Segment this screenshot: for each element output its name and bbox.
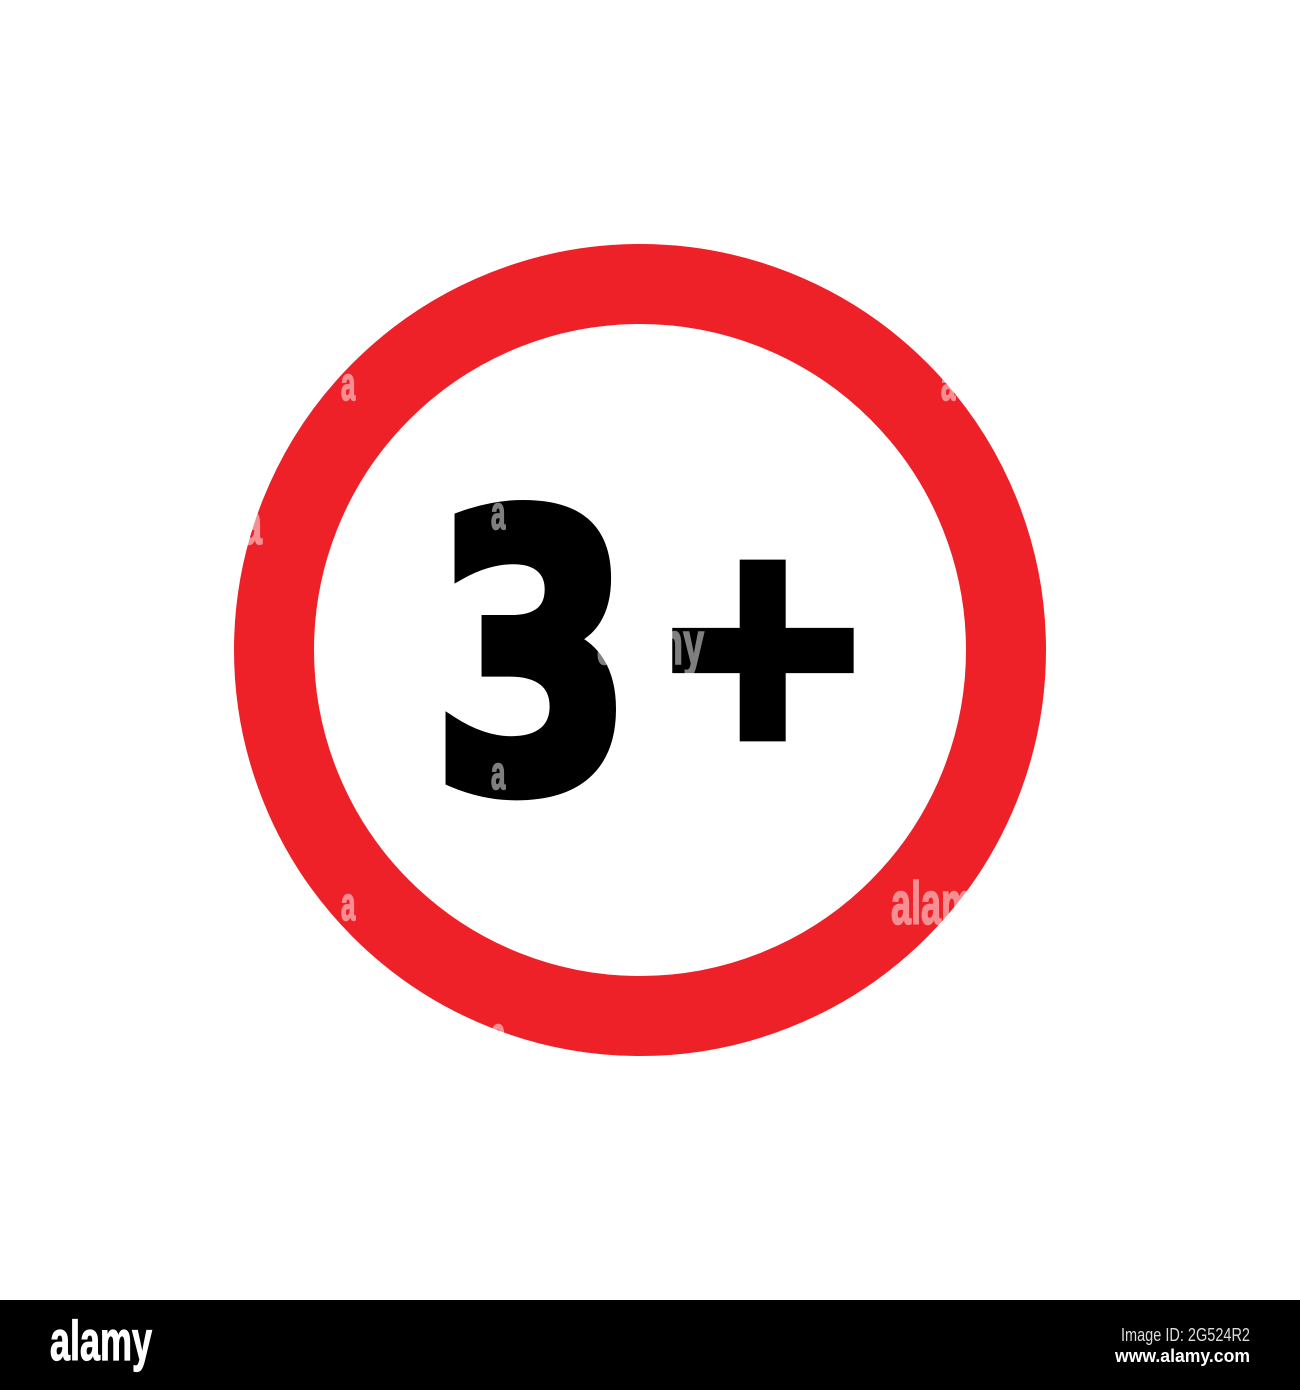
stock watermarks: a	[242, 491, 262, 557]
footer logo: alamy	[50, 1309, 152, 1372]
footer bar	[0, 1300, 1300, 1390]
stock watermarks: a	[341, 359, 356, 411]
image id: Image ID: 2G524R2	[1121, 1325, 1250, 1345]
stock watermarks: alamy	[597, 610, 704, 677]
stock watermarks: alamy	[891, 871, 993, 937]
website: www.alamy.com	[1114, 1346, 1250, 1366]
stock watermarks: a	[491, 488, 506, 540]
plus symbol: +	[662, 455, 864, 838]
numeral 3: 3	[432, 438, 633, 876]
stock watermarks: a	[491, 748, 506, 800]
stock watermarks: a	[491, 1009, 506, 1061]
stock watermarks	[242, 359, 993, 1061]
stock watermarks: a	[941, 359, 956, 411]
stock watermarks: a	[341, 879, 356, 931]
sign: red ring	[274, 284, 1006, 1016]
